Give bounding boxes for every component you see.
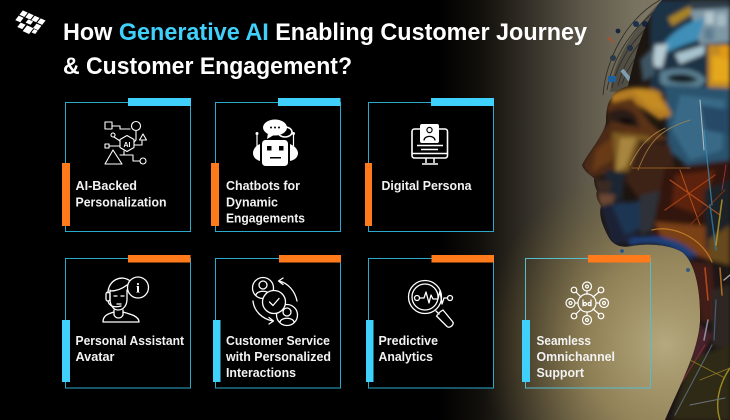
label bbox=[378, 334, 438, 364]
label: AI-Backed bbox=[76, 179, 137, 193]
label bbox=[76, 334, 185, 364]
label bbox=[225, 334, 331, 380]
label: Engagements bbox=[226, 212, 305, 226]
icon: service cycle bbox=[252, 278, 298, 326]
forehead orange bbox=[610, 87, 672, 120]
label: Avatar bbox=[76, 350, 115, 364]
label bbox=[76, 179, 166, 210]
label: Analytics bbox=[378, 350, 433, 364]
icon: digital persona monitor bbox=[412, 124, 448, 164]
label bbox=[536, 334, 615, 380]
icon: omnichannel hub bbox=[566, 282, 608, 324]
label: Chatbots for bbox=[226, 179, 300, 193]
lips, chin bbox=[594, 178, 612, 192]
label: Predictive bbox=[378, 334, 438, 348]
neck reds bbox=[650, 158, 730, 238]
card: Personal Assistant Avatar bbox=[62, 255, 190, 388]
card: Customer Service with Personalized Interactions bbox=[213, 255, 341, 388]
label: Personal Assistant bbox=[76, 334, 185, 348]
card: AI-Backed Personalization bbox=[62, 98, 191, 232]
icon: assistant avatar: i bbox=[136, 282, 140, 296]
card: Predictive Analytics bbox=[366, 255, 494, 388]
label: Personalization bbox=[76, 196, 166, 210]
label: Customer Service bbox=[226, 334, 330, 348]
label: Digital Persona bbox=[382, 179, 473, 193]
card: Digital Persona bbox=[365, 98, 494, 232]
label: Interactions bbox=[226, 366, 296, 380]
label: with Personalized bbox=[225, 350, 331, 364]
label: Seamless bbox=[536, 334, 591, 348]
skull bbox=[650, 0, 730, 95]
nose & cheek bbox=[582, 125, 625, 178]
label: Support bbox=[536, 366, 585, 380]
label bbox=[226, 179, 305, 226]
card: Chatbots for Dynamic Engagements bbox=[211, 98, 340, 232]
lower neck bbox=[660, 255, 730, 420]
icon: magnifier with pulse bbox=[408, 280, 453, 327]
logo bbox=[11, 10, 46, 36]
wires around skull bbox=[603, 0, 700, 95]
label: Omnichannel bbox=[536, 350, 615, 364]
portrait: AI head artwork bbox=[575, 0, 730, 420]
title: & Customer Engagement? bbox=[63, 53, 352, 80]
card: Seamless Omnichannel Support bbox=[522, 255, 650, 388]
painterly strokes bbox=[630, 100, 730, 420]
temple & blue side bbox=[665, 85, 730, 168]
label: Dynamic bbox=[226, 196, 278, 210]
icon: chatbot bbox=[253, 120, 298, 166]
icon: AI network: AI bbox=[124, 142, 131, 149]
eye bbox=[608, 109, 640, 128]
title: How Generative AI Enabling Customer Journey bbox=[63, 19, 588, 46]
title bbox=[63, 19, 588, 80]
